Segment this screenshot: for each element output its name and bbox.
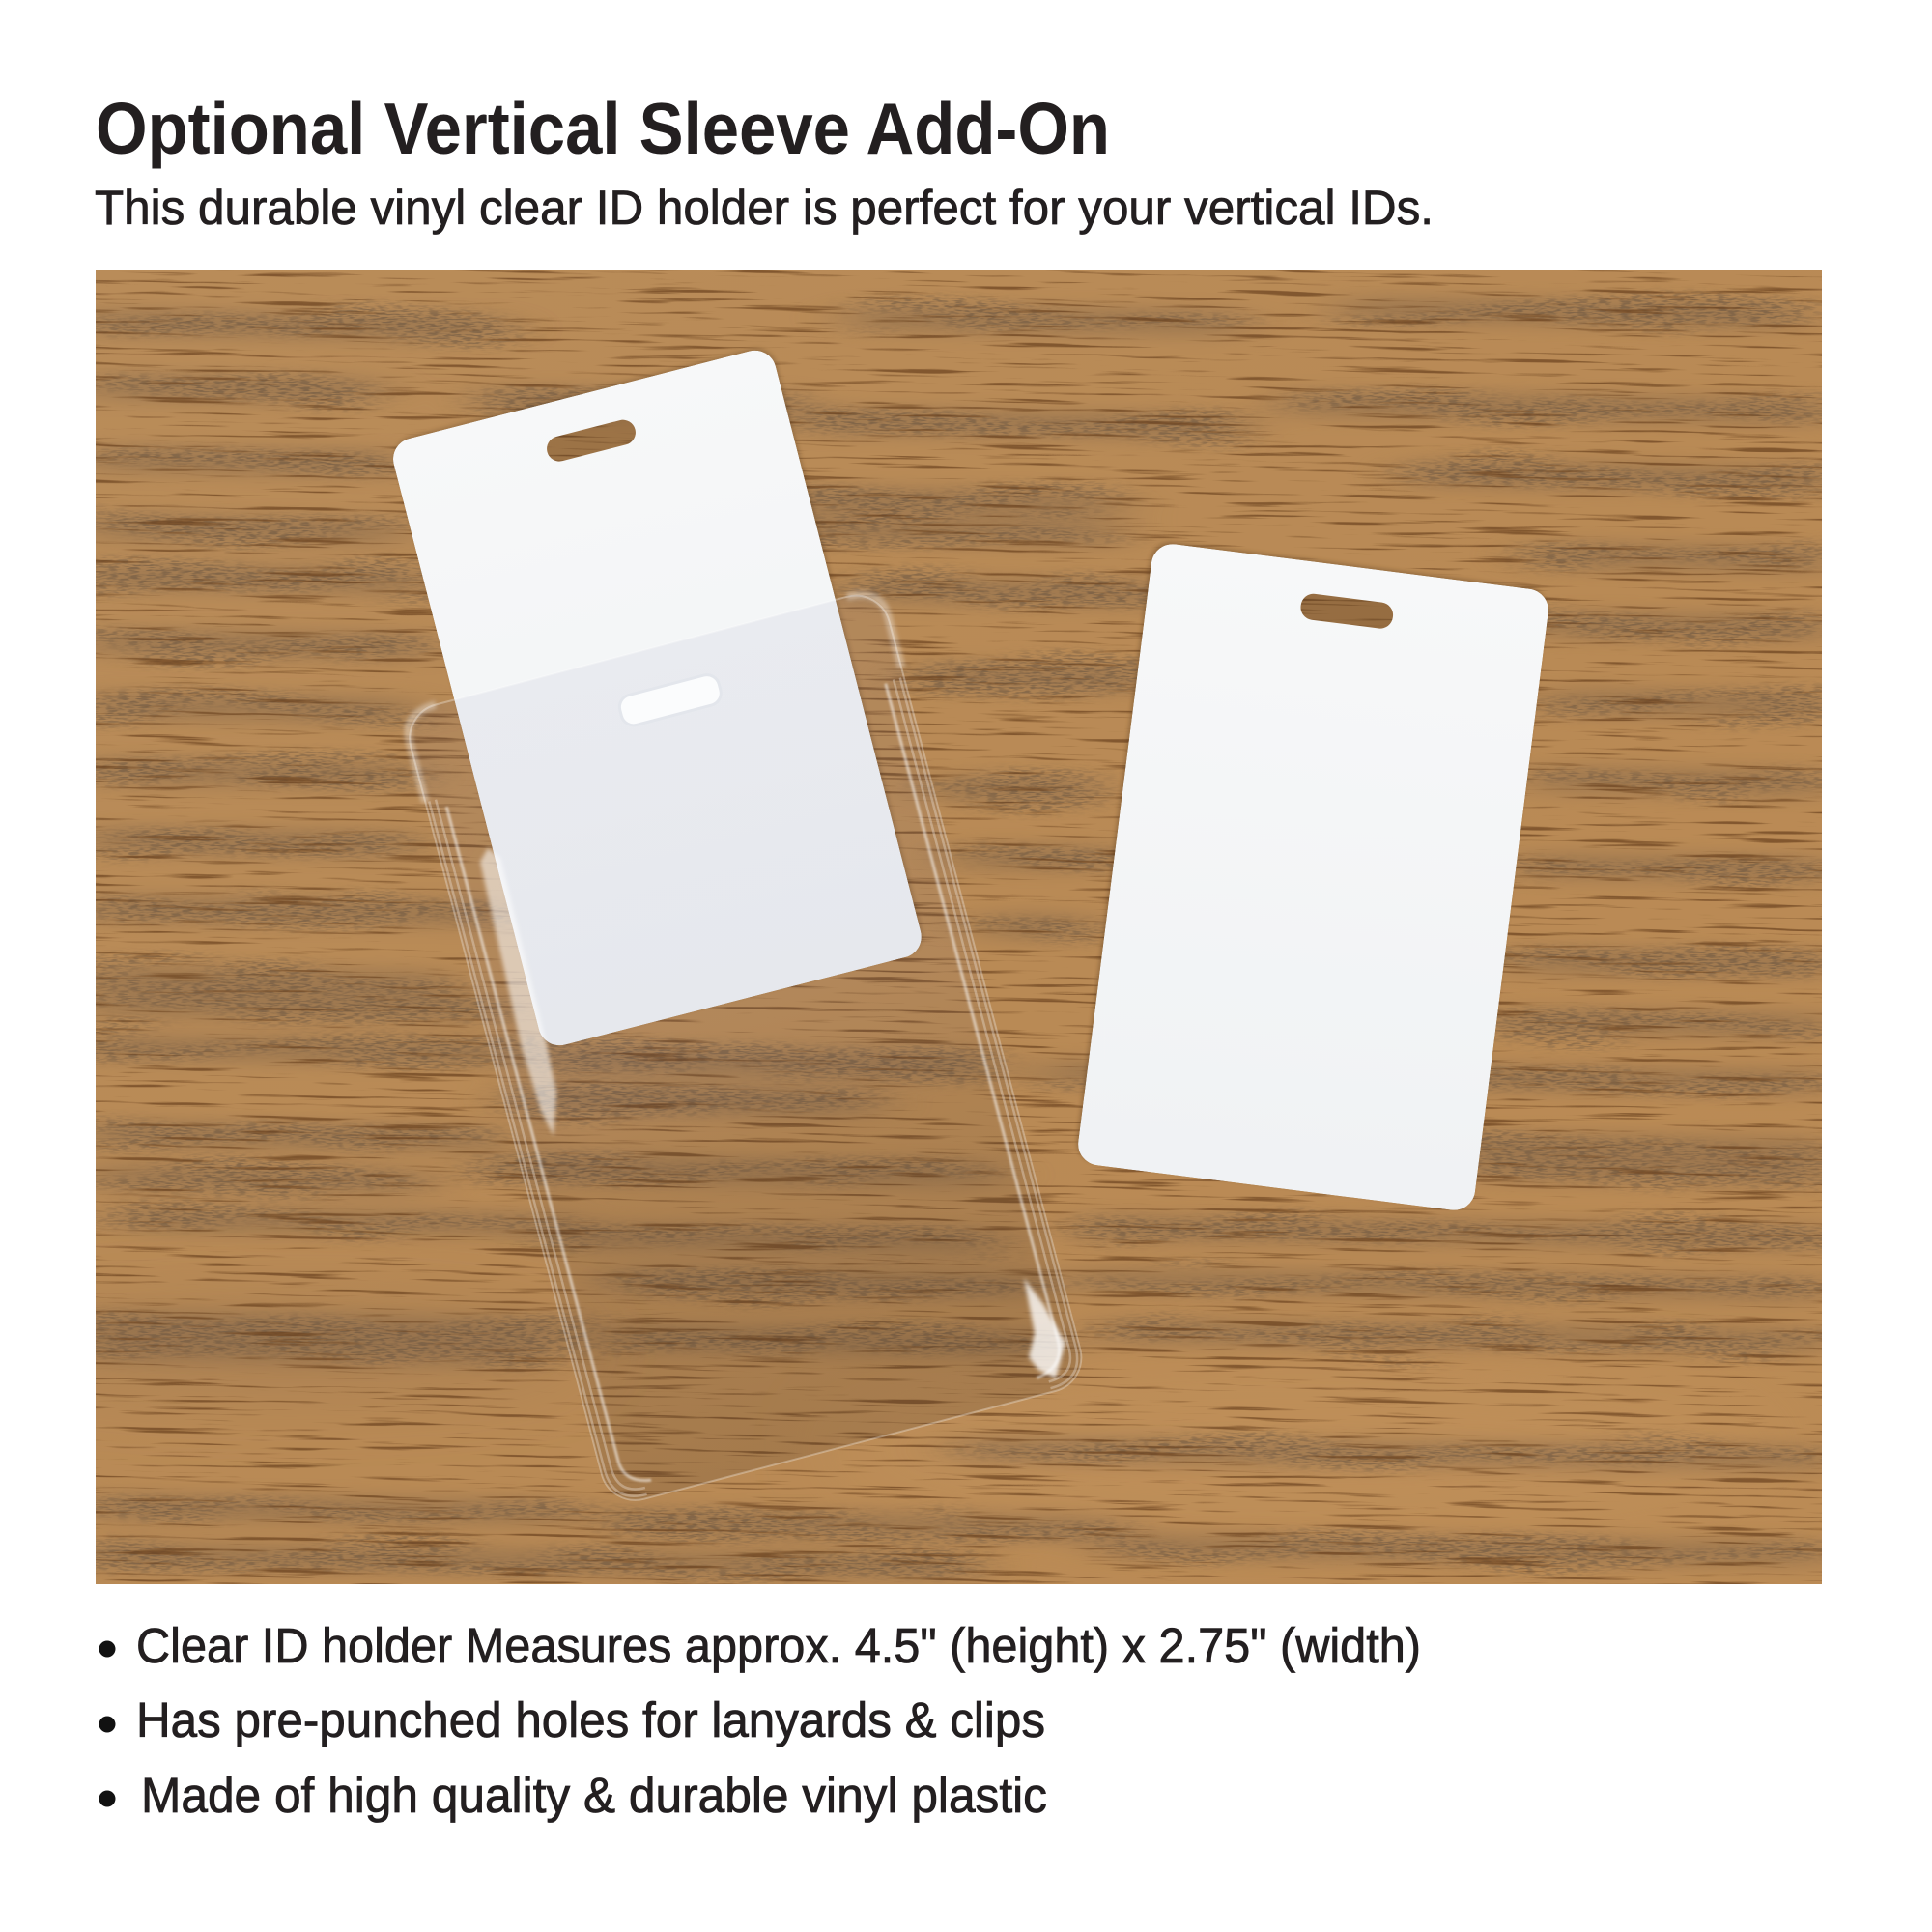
wood surface xyxy=(96,270,1822,1584)
subtitle: This durable vinyl clear ID holder is perfect for your vertical IDs. xyxy=(95,181,1434,235)
bullet 1: Clear ID holder Measures approx. 4.5" (height) x 2.75" (width) xyxy=(136,1618,1421,1673)
sleeve right rim xyxy=(898,677,1078,1389)
id card: left, partly inside sleeve xyxy=(388,344,928,1050)
sleeve bottom welded edge xyxy=(656,1385,1038,1486)
sleeve left rim xyxy=(429,792,647,1503)
sleeve right seam xyxy=(893,679,1072,1383)
highlight: sleeve bottom right glare xyxy=(1024,1278,1065,1378)
id card: right xyxy=(1074,539,1551,1212)
sleeve outline xyxy=(402,588,1089,1508)
title: Optional Vertical Sleeve Add-On xyxy=(96,88,1110,169)
sleeve body xyxy=(454,601,1081,1500)
sleeve left seam xyxy=(436,792,645,1494)
sleeve top corner rims xyxy=(402,588,904,803)
bullet 2: Has pre-punched holes for lanyards & clips xyxy=(136,1692,1045,1747)
panel: wood table photo xyxy=(96,270,1822,1584)
sleeve right bright line xyxy=(883,682,1062,1380)
clear vinyl sleeve xyxy=(402,588,1089,1508)
sleeve slot xyxy=(621,676,720,724)
bullet 3: Made of high quality & durable vinyl plastic xyxy=(141,1768,1047,1823)
highlight: sleeve left glare xyxy=(480,848,556,1136)
bullet list xyxy=(99,1618,1421,1823)
sleeve left bright line xyxy=(446,800,651,1487)
